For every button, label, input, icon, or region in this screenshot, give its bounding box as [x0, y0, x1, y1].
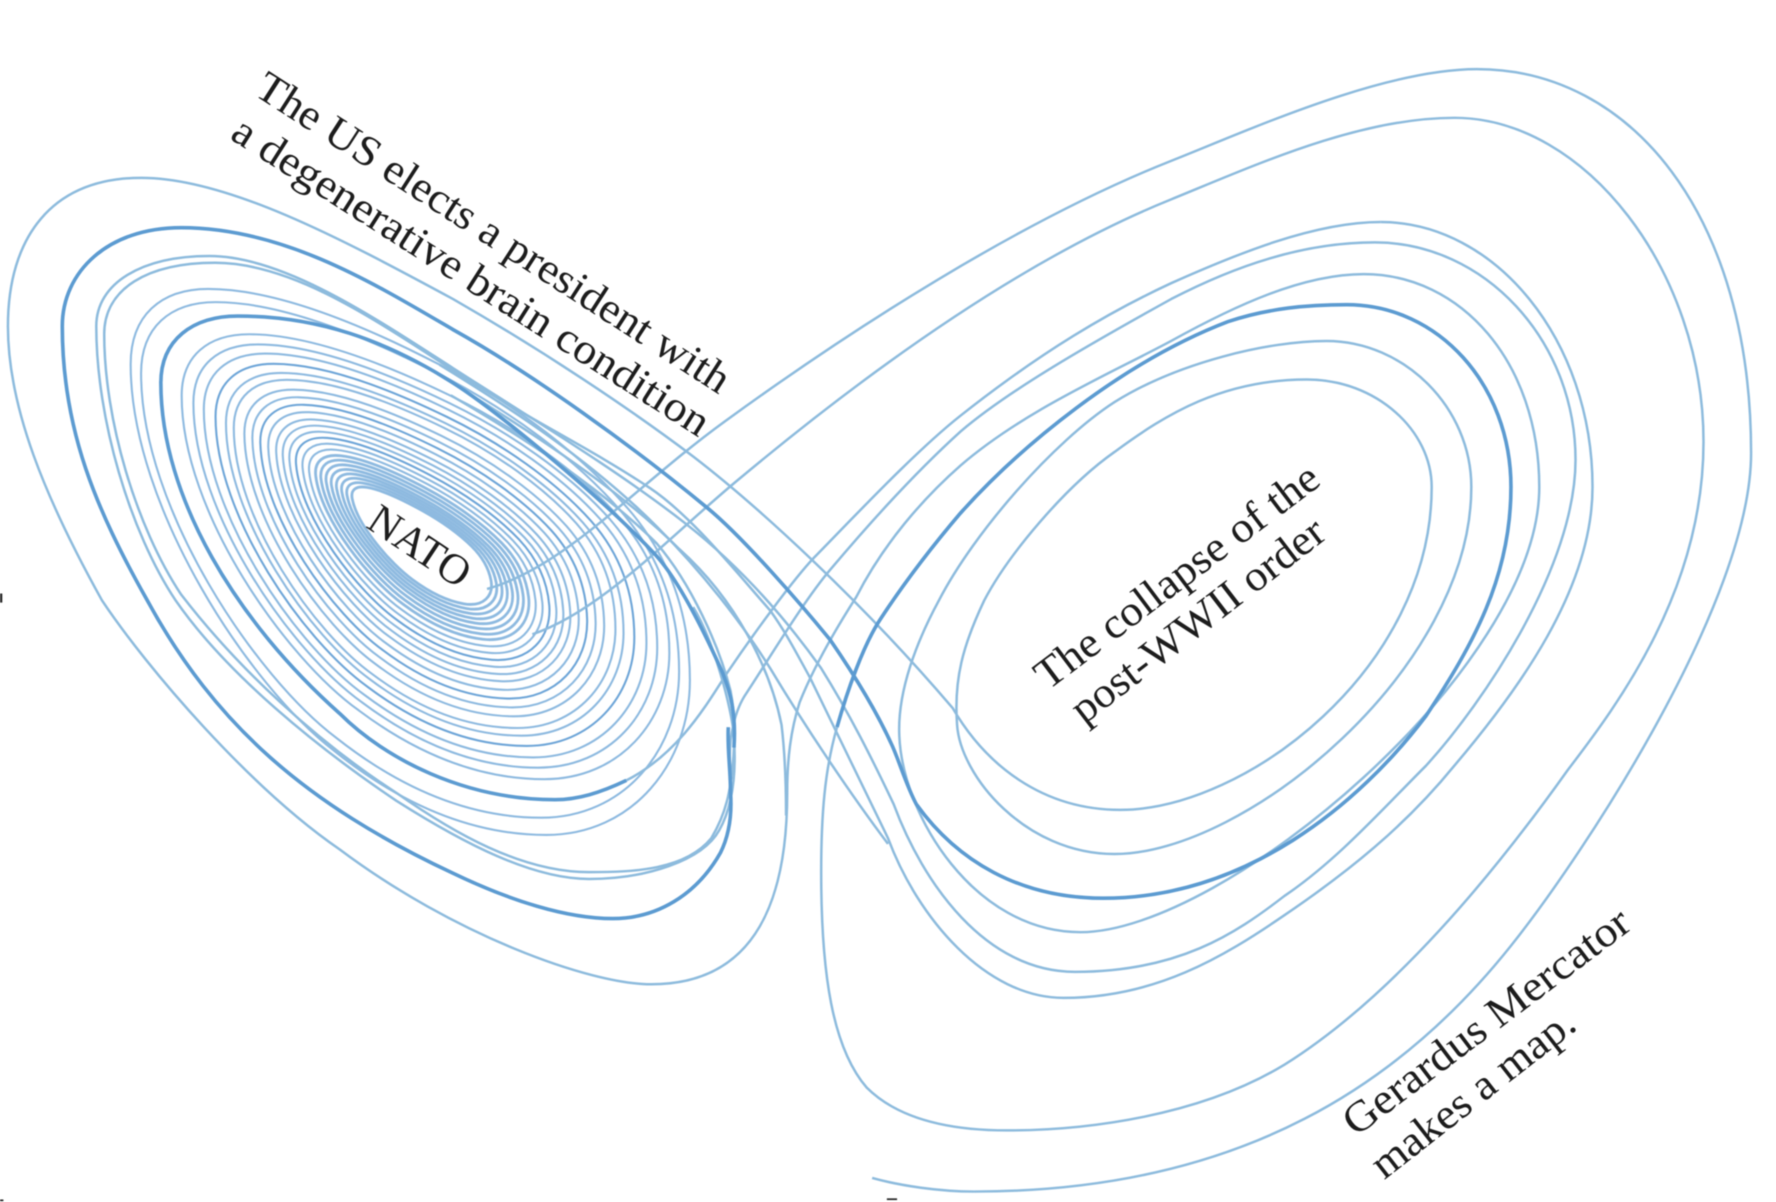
trajectory: path from T2 loop through left double band	[96, 242, 1576, 972]
trajectory: second outer right lobe line into tail	[532, 118, 1704, 1130]
label: The US elects a president with a degenerative brain condition: a degenerative brain condition	[223, 107, 719, 446]
label: Gerardus Mercator makes a map.: makes a map.	[1361, 999, 1585, 1188]
small edge marks	[0, 594, 897, 1201]
label: The collapse of the post-WWII order: post-WWII order	[1061, 508, 1334, 733]
label: NATO: NATO	[359, 496, 480, 598]
trajectory: emphasised inner left loop	[161, 316, 734, 800]
trajectory: left double band into outer bottom right loop	[104, 222, 1593, 998]
label: Gerardus Mercator makes a map.: Gerardus Mercator	[1334, 898, 1640, 1145]
trajectory: outermost-but-two right loop descending into the left lobe	[626, 222, 1381, 780]
left lobe: inner spiral loops around NATO	[131, 289, 690, 835]
trajectory: closed path through outermost left loop and inner right loops	[8, 178, 1539, 984]
label: The collapse of the post-WWII order: The collapse of the	[1025, 454, 1329, 699]
trajectory: extra exit lines through the crossing	[437, 365, 888, 844]
trajectory: emphasised line through right lobe and left lobe	[62, 228, 1511, 919]
label: The US elects a president with a degenerative brain condition: The US elects a president with	[247, 63, 739, 403]
trajectory: outer right lobe line ending at bottom	[487, 69, 1751, 1192]
